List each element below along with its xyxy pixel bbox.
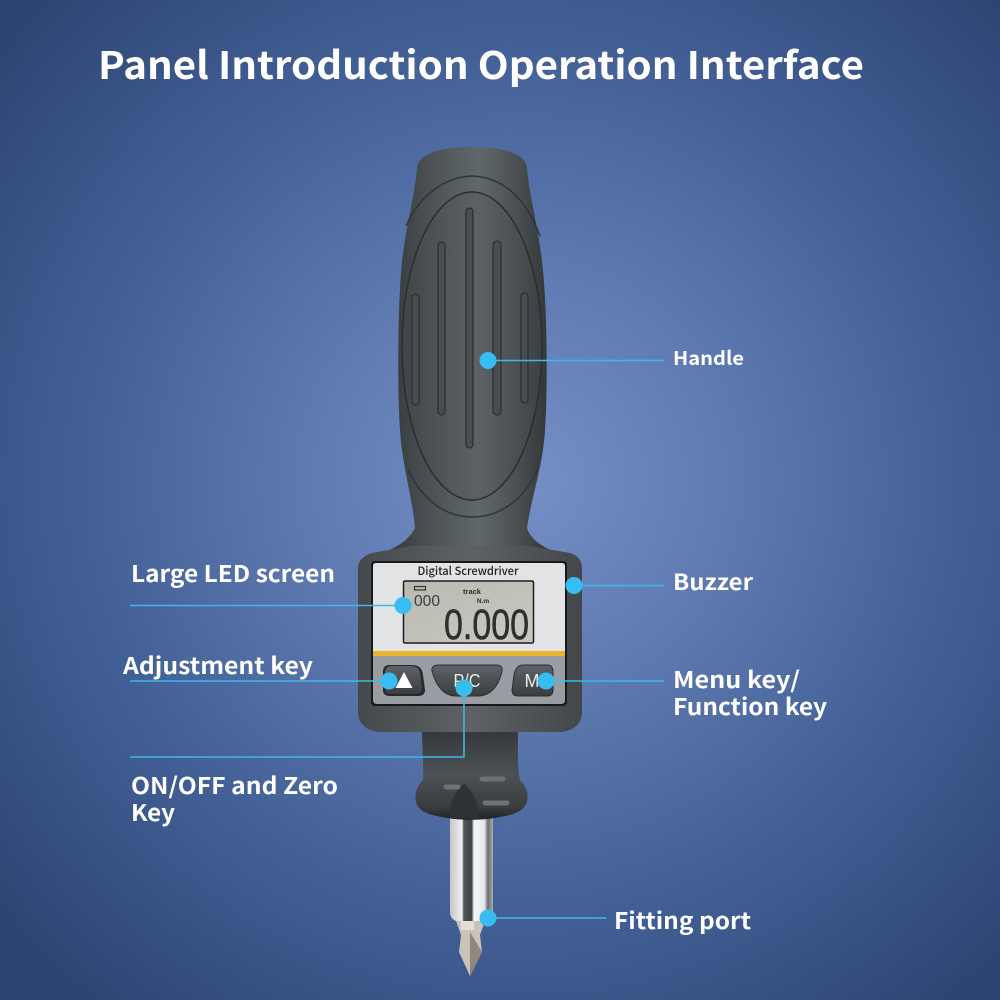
track label: track bbox=[463, 587, 482, 596]
callout: adjustment key: Adjustment key bbox=[122, 647, 313, 681]
callout: on/off and zero key: ON/OFF and Zero bbox=[131, 767, 338, 801]
M key bbox=[512, 665, 553, 696]
P/C key: P/C bbox=[454, 671, 480, 691]
callout: large LED screen bbox=[130, 555, 412, 614]
upper light panel bbox=[373, 563, 565, 651]
title: Panel Introduction Operation Interface bbox=[98, 35, 864, 90]
small digits: 000 bbox=[414, 593, 440, 610]
callout: buzzer: Buzzer bbox=[673, 565, 753, 597]
collar bbox=[415, 730, 528, 820]
lower grey panel bbox=[373, 656, 565, 704]
bit tip bbox=[456, 921, 485, 976]
control body bbox=[358, 546, 582, 732]
callout: on/off and zero key: Key bbox=[131, 794, 175, 828]
callout: menu key: Menu key/ bbox=[673, 661, 800, 695]
callout: handle bbox=[480, 344, 744, 371]
callout: buzzer bbox=[566, 565, 753, 597]
main digits: 0.000 bbox=[444, 601, 529, 649]
M key: M bbox=[524, 671, 540, 691]
callout: large LED screen: Large LED screen bbox=[131, 555, 335, 589]
callout: fitting port: Fitting port bbox=[614, 902, 751, 936]
panel heading: Digital Screwdriver bbox=[418, 563, 519, 579]
screwdriver illustration bbox=[358, 147, 582, 976]
P/C key bbox=[432, 665, 502, 696]
LCD screen bbox=[404, 581, 534, 649]
grip grooves bbox=[412, 208, 528, 448]
steel shaft bbox=[450, 815, 493, 976]
callout: fitting port bbox=[480, 902, 751, 936]
unit label: N.m bbox=[477, 598, 489, 605]
callout: on/off and zero key bbox=[130, 680, 472, 828]
callout: menu key: Function key bbox=[673, 688, 827, 722]
callout: handle: Handle bbox=[673, 344, 744, 371]
panel frame bbox=[371, 561, 567, 706]
callout: menu key bbox=[538, 661, 827, 722]
handle bbox=[385, 147, 555, 552]
yellow strip bbox=[373, 651, 565, 656]
up key bbox=[383, 665, 425, 696]
callout: adjustment key bbox=[122, 647, 398, 690]
battery icon bbox=[414, 586, 426, 590]
